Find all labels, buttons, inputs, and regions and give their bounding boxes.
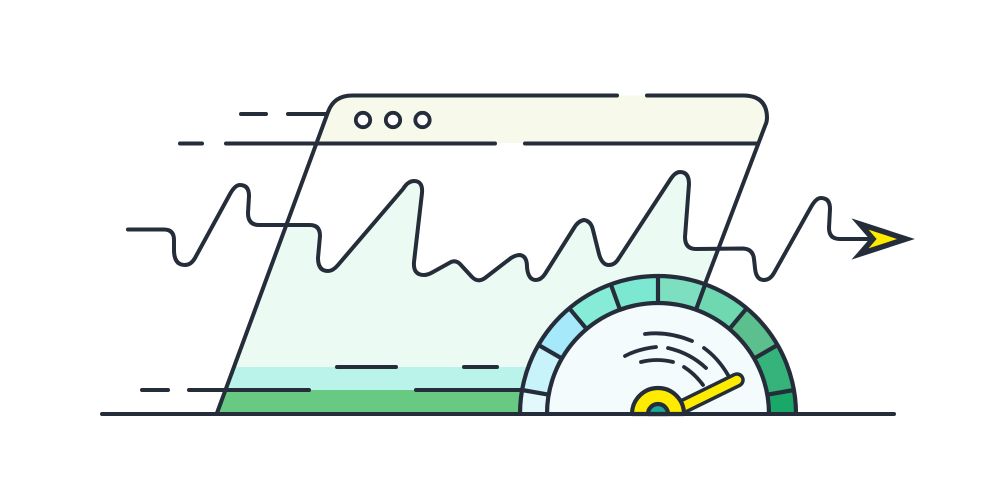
browser window outline bbox=[217, 96, 767, 413]
left edge and top-left corner bbox=[217, 96, 617, 413]
gauge dial face bbox=[547, 303, 769, 414]
panel: light teal band bbox=[226, 367, 530, 390]
panel: green band bbox=[217, 390, 521, 413]
motion dashes bbox=[142, 114, 521, 390]
panel: browser header fill bbox=[317, 96, 767, 143]
gauge hub bbox=[632, 388, 684, 414]
top-right corner and right edge bbox=[647, 96, 767, 284]
icon: three window dots bbox=[356, 113, 430, 127]
speed lines bbox=[625, 333, 728, 385]
ground line bbox=[102, 412, 894, 416]
gauge bbox=[520, 276, 796, 414]
chart line bbox=[128, 172, 872, 280]
gauge outlines and dividers bbox=[520, 276, 796, 414]
header divider bbox=[226, 142, 757, 146]
gauge needle bbox=[680, 380, 737, 408]
panel: area under chart line bbox=[226, 172, 718, 390]
icon: arrow head bbox=[860, 224, 906, 254]
gauge colour segments bbox=[534, 289, 782, 414]
